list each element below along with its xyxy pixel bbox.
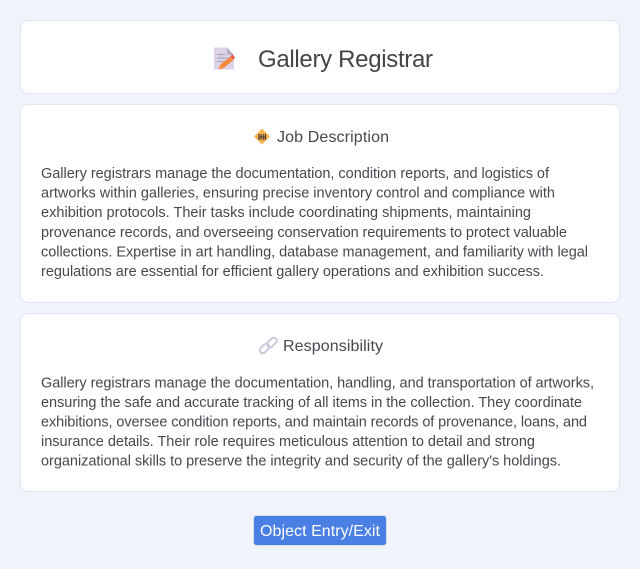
text block: responsibility	[41, 376, 594, 470]
text block: job description: exhibition protocols. Their tasks include coordinating shipments, maintaining	[41, 205, 531, 221]
title: Gallery Registrar	[258, 46, 433, 73]
panel: title card	[20, 20, 620, 94]
panel: responsibility	[20, 314, 620, 492]
icon: document with pencil	[214, 48, 235, 70]
icon: chain link	[258, 336, 278, 355]
text block: job description: provenance records, and overseeing conservation requirements to protect valuable	[41, 225, 567, 241]
heading: job description: Job Description	[277, 129, 389, 146]
icon: diamond road sign	[254, 128, 270, 144]
text block: responsibility: Gallery registrars manage the documentation, handling, and transportation of artworks,	[41, 376, 594, 392]
text block: job description: regulations are essential for efficient gallery operations and exhibition success.	[41, 264, 544, 280]
text block: responsibility: exhibitions, oversee condition reports, and maintain records of provenance, loans, and	[41, 414, 587, 430]
heading: responsibility: Responsibility	[283, 338, 383, 355]
text block: job description: artworks within galleries, ensuring precise inventory control and compliance with	[41, 186, 555, 202]
text block: job description	[41, 166, 588, 280]
text block: job description: collections. Expertise in art handling, database management, and familiarity with legal	[41, 244, 588, 260]
text block: responsibility: organizational skills to preserve the integrity and security of the gallery's holdings.	[41, 454, 561, 470]
text block: responsibility: insurance details. Their role requires meticulous attention to detail and strong	[41, 434, 535, 450]
button: object entry/exit	[254, 516, 386, 546]
panel: job description	[20, 104, 620, 302]
text block: responsibility: ensuring the safe and accurate tracking of all items in the collection. They coordinate	[41, 395, 582, 411]
button: object entry/exit: Object Entry/Exit	[260, 523, 381, 540]
text block: job description: Gallery registrars manage the documentation, condition reports, and logistics of	[41, 166, 550, 182]
